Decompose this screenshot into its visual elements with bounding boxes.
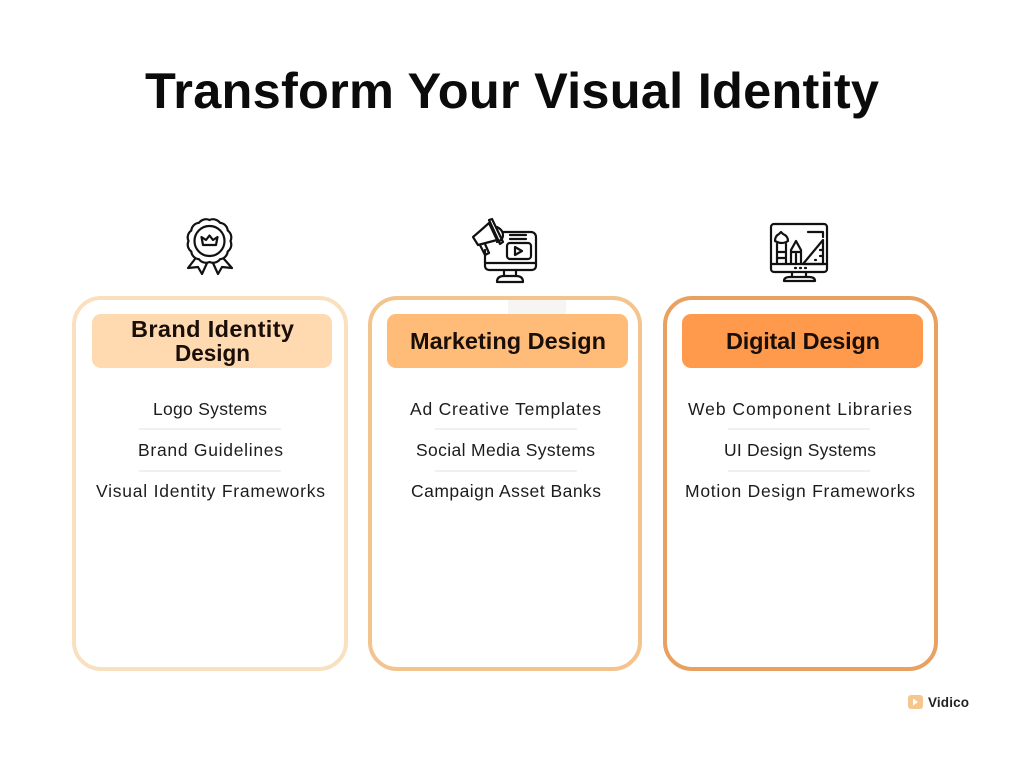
- list: Digital items: [685, 399, 915, 501]
- logo: Vidico: Vidico: [928, 695, 969, 710]
- heading pill: Brand Identity Design: Brand Identity: [131, 316, 294, 342]
- panel: Brand Identity Design: [74, 298, 346, 669]
- icon: monitor with megaphone: [473, 219, 536, 282]
- heading pill: Marketing Design: Marketing Design: [410, 328, 606, 354]
- title: Transform Your Visual Identity: [145, 62, 879, 119]
- list: Brand Identity items: Logo Systems: [153, 399, 267, 419]
- list: Digital items: UI Design Systems: [724, 440, 876, 460]
- panel: Digital Design: [665, 298, 936, 669]
- panel: Marketing Design: [370, 298, 640, 669]
- list: Marketing items: Campaign Asset Banks: [411, 481, 601, 501]
- heading pill: Digital Design: Digital Design: [726, 328, 880, 354]
- list: Marketing items: Social Media Systems: [416, 440, 595, 460]
- list: Brand Identity items: [96, 399, 325, 501]
- logo: Vidico: [908, 695, 969, 710]
- list: Brand Identity items: Visual Identity Frameworks: [96, 481, 325, 501]
- list: Marketing items: [410, 399, 601, 501]
- list: Digital items: Web Component Libraries: [688, 399, 912, 419]
- list: Brand Identity items: Brand Guidelines: [138, 440, 283, 460]
- heading pill: Marketing Design: [387, 314, 628, 368]
- heading pill: Brand Identity Design: Design: [175, 340, 250, 366]
- icon: award badge with crown: [188, 219, 232, 274]
- icon: monitor with design tools: [771, 224, 827, 281]
- heading pill: Digital Design: [682, 314, 923, 368]
- list: Digital items: Motion Design Frameworks: [685, 481, 915, 501]
- heading pill: Brand Identity Design: [92, 314, 332, 368]
- list: Marketing items: Ad Creative Templates: [410, 399, 601, 419]
